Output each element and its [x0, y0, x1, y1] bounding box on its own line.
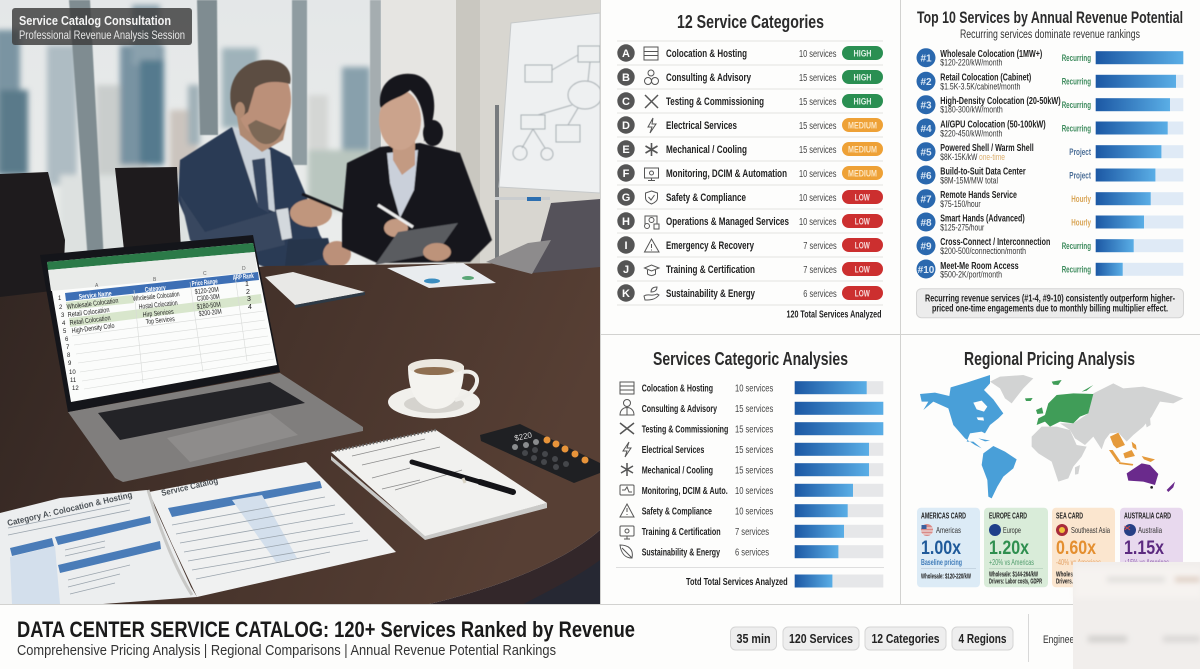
analysis row: training: Training & Certification: [642, 527, 721, 538]
spreadsheet text: $200-20M: [198, 309, 222, 318]
rank 8: Hourly: [1071, 217, 1091, 227]
card: Americas: [917, 508, 980, 587]
analysis row: colocation: Colocation & Hosting: [642, 383, 713, 394]
card: Southeast Asia: [1052, 508, 1115, 587]
analysis row: training: [620, 525, 883, 539]
rank 10: Recurring: [1062, 265, 1091, 275]
rank 9: $200-500/connection/month: [940, 246, 1026, 256]
row K: K: [622, 288, 630, 300]
footer subtitle: Comprehensive Pricing Analysis | Regional Comparisons | Annual Revenue Potential Rankings: [17, 642, 556, 659]
map: Europe: [1025, 380, 1093, 427]
row C: C: [622, 96, 630, 108]
card: Europe: [984, 508, 1048, 587]
spreadsheet text: 1: [245, 281, 249, 288]
rank 4: Recurring: [1062, 123, 1091, 133]
office wall: [381, 0, 600, 270]
row I: [617, 236, 883, 254]
card: Europe: Wholesale: $144-264/kW: [989, 572, 1038, 578]
panel: regional pricing analysis: [917, 349, 1183, 587]
card: Australia: 1.15x: [1124, 538, 1164, 559]
row D: MEDIUM: [848, 120, 877, 130]
map: Americas: [920, 375, 1017, 498]
rank 5: Powered Shell / Warm Shell: [940, 143, 1034, 154]
spreadsheet text: $120-20M: [194, 287, 219, 296]
row E: MEDIUM: [848, 144, 877, 154]
rank 3: #3: [920, 100, 932, 112]
rank 6: $8M-15M/MW total: [940, 175, 998, 185]
window mullions: [69, 0, 381, 262]
rank 3: High-Density Colocation (20-50kW): [940, 96, 1061, 107]
rank 6: Project: [1069, 170, 1091, 180]
rank 9: Cross-Connect / Interconnection: [940, 237, 1050, 248]
rank 5: $8K-15K/kW: [940, 152, 978, 162]
rank 2: Retail Colocation (Cabinet): [940, 72, 1031, 84]
chip: 12 Categories: 12 Categories: [872, 631, 940, 646]
row G: LOW: [855, 192, 870, 202]
map: Hudson Bay and Great Lakes: [973, 401, 987, 421]
analysis row: testing: [620, 422, 883, 436]
rank 1: $120-220/kW/month: [940, 58, 1002, 68]
rank 10: #10: [918, 265, 935, 276]
spreadsheet text: 2: [59, 305, 63, 311]
card: Southeast Asia: -40% vs Americas: [1056, 558, 1101, 567]
rank 4: [916, 118, 1183, 138]
footer title: DATA CENTER SERVICE CATALOG: 120+ Services Ranked by Revenue: [17, 617, 635, 642]
background laptop: [486, 199, 600, 274]
rank 5: [916, 142, 1183, 162]
spreadsheet text: Top Services: [145, 316, 175, 326]
analysis row: consulting: 15 services: [735, 403, 773, 415]
spreadsheet text: 2: [246, 289, 250, 296]
row A: HIGH: [854, 48, 872, 58]
row G: 10 services: [799, 193, 836, 204]
card: Southeast Asia: SEA CARD: [1056, 510, 1083, 520]
row F: [617, 164, 883, 182]
rank 2: Recurring: [1062, 77, 1091, 87]
spreadsheet text: Hirp Services: [142, 309, 174, 319]
row I: Emergency & Recovery: [666, 240, 755, 252]
rank 6: Build-to-Suit Data Center: [940, 166, 1026, 178]
whiteboard with diagram: [495, 13, 602, 275]
rank 10: $500-2K/port/month: [940, 269, 1002, 279]
analysis total row: [686, 574, 883, 588]
row G: [617, 188, 883, 206]
analysis row: electrical: 15 services: [735, 444, 773, 456]
rank 7: Hourly: [1071, 194, 1091, 204]
spreadsheet text: A: [95, 283, 99, 289]
analysis row: mechanical: [621, 463, 883, 476]
spreadsheet text: Retail Colocation: [69, 315, 111, 327]
row J: LOW: [855, 264, 870, 274]
map: Australia: [1127, 463, 1175, 492]
subtitle: Recurring services dominate revenue rankings: [960, 29, 1140, 41]
analysis row: testing: 15 services: [735, 424, 773, 436]
spreadsheet text: 11: [70, 378, 77, 384]
rank 9: #9: [920, 242, 932, 252]
analysis row: consulting: Consulting & Advisory: [642, 404, 717, 415]
row G: Safety & Compliance: [666, 192, 746, 204]
rank 7: $75-150/hour: [940, 199, 981, 209]
rank 5: #5: [920, 148, 932, 158]
row B: HIGH: [854, 72, 872, 82]
analysis row: mechanical: 15 services: [735, 464, 773, 476]
spiral notepad with pen: [331, 430, 547, 540]
row I: LOW: [855, 240, 870, 250]
rank 5: Project: [1069, 147, 1091, 157]
row F: 10 services: [799, 169, 836, 180]
open service catalog book: Service Catalog: [160, 475, 219, 498]
row A: A: [622, 48, 630, 60]
row H: [617, 212, 883, 230]
spreadsheet text: 7: [66, 345, 70, 351]
rank 5: one-time: [979, 152, 1005, 162]
open service catalog book: [0, 462, 396, 604]
row G: G: [622, 192, 630, 204]
row A: [617, 44, 883, 62]
callout: recurring revenue: [916, 289, 1184, 318]
rank 3: $180-300/kW/month: [940, 105, 1003, 115]
chip: 35 min: [730, 627, 776, 650]
rank 4: AI/GPU Colocation (50-100kW): [940, 120, 1046, 130]
row E: [617, 140, 883, 158]
card: Australia: Australia: [1138, 525, 1162, 535]
panel: services categoric analysis: [616, 349, 884, 588]
spreadsheet text: 8: [67, 353, 71, 359]
spreadsheet text: 10: [69, 370, 76, 376]
analysis row: monitoring: Monitoring, DCIM & Auto.: [642, 486, 728, 497]
row B: Consulting & Advisory: [666, 72, 752, 84]
chip: 35 min: 35 min: [736, 631, 771, 646]
row K: 6 services: [803, 289, 837, 300]
row H: H: [622, 216, 630, 228]
spreadsheet text: Category: [144, 285, 166, 294]
card: Americas: AMERICAS CARD: [921, 510, 966, 520]
window with city skyline: [0, 0, 381, 267]
card: Europe: 1.20x: [989, 538, 1029, 559]
rank 1: [916, 48, 1183, 68]
row A: 10 services: [799, 49, 836, 60]
analysis row: mechanical: Mechanical / Cooling: [642, 465, 713, 476]
row C: [617, 92, 883, 110]
row C: 15 services: [799, 97, 836, 108]
calculator phone: $220: [514, 430, 533, 443]
spreadsheet text: Service Name: [78, 291, 112, 301]
spreadsheet text: 12: [72, 386, 79, 392]
spreadsheet text: C: [203, 271, 207, 277]
rank 3: Recurring: [1062, 100, 1091, 110]
row J: [617, 260, 883, 278]
card: Europe: Drivers: Labor costs, GDPR: [989, 578, 1042, 586]
row J: J: [623, 264, 629, 276]
rank 6: [916, 166, 1183, 185]
chip: 120 Services: 120 Services: [789, 631, 853, 646]
analysis row: colocation: [620, 381, 883, 394]
row I: I: [624, 240, 628, 252]
heading: Regional Pricing Analysis: Regional Pricing Analysis: [964, 349, 1135, 369]
row E: 15 services: [799, 145, 836, 156]
spreadsheet text: [58, 266, 254, 392]
rank 4: $220-450/kW/month: [940, 128, 1002, 138]
spreadsheet text: B: [153, 277, 157, 283]
photo caption: [12, 8, 192, 45]
analysis row: training: 7 services: [735, 526, 769, 538]
spreadsheet text: Wholesale Colocation: [132, 291, 180, 303]
map: Southeast Asia: [1109, 433, 1155, 466]
row D: D: [622, 120, 630, 132]
row B: 15 services: [799, 73, 836, 84]
spreadsheet text: 9: [68, 361, 72, 367]
rank 9: Recurring: [1062, 241, 1091, 251]
card: Europe: EUROPE CARD: [989, 510, 1027, 520]
row J: Training & Certification: [666, 264, 755, 276]
spreadsheet text: 3: [61, 313, 65, 319]
chip: 4 Regions: 4 Regions: [958, 631, 1006, 646]
rank 8: #8: [920, 218, 932, 229]
spreadsheet text: ARP Rank: [232, 273, 254, 282]
table lower edge and floor: [421, 530, 600, 606]
spreadsheet text: 5: [63, 329, 67, 335]
heading: Services Categoric Analysis: Services Categoric Analysies: [653, 349, 848, 369]
rank 4: #4: [920, 124, 932, 135]
photo caption: Professional Revenue Analysis Session: [19, 28, 185, 42]
rank 8: [916, 212, 1183, 233]
card: Americas: Baseline pricing: [921, 557, 962, 567]
row H: 10 services: [799, 217, 836, 228]
blurred corner overlay: [1073, 562, 1200, 669]
laptop with spreadsheet: [40, 235, 363, 482]
documents on table: [265, 263, 496, 308]
chip: 120 Services: [783, 627, 859, 650]
row E: Mechanical / Cooling: [666, 144, 747, 156]
rank 8: $125-275/hour: [940, 223, 984, 233]
spreadsheet text: Retail Colocation: [67, 307, 110, 319]
woman in black suit: [342, 74, 492, 265]
analysis row: electrical: Electrical Services: [642, 445, 705, 456]
analysis row: monitoring: 10 services: [735, 485, 773, 497]
footer band: [0, 605, 1200, 669]
spreadsheet text: 1: [58, 296, 62, 302]
rank 2: #2: [920, 77, 932, 88]
rank 1: Recurring: [1062, 53, 1091, 63]
heading: 12 Service Categories: 12 Service Categories: [677, 12, 824, 32]
card: Southeast Asia: Wholes: [1056, 572, 1073, 578]
spreadsheet text: 6: [65, 337, 69, 343]
card: Southeast Asia: Southeast Asia: [1071, 525, 1110, 535]
rank 6: #6: [920, 171, 932, 182]
card: Americas: Wholesale: $120-220/kW: [921, 574, 971, 580]
row C: HIGH: [854, 96, 872, 106]
photo caption: Service Catalog Consultation: [19, 13, 171, 28]
analysis row: safety: 10 services: [735, 506, 773, 518]
analysis row: sustainability: 6 services: [735, 546, 769, 558]
analysis row: safety: [620, 504, 883, 518]
row B: [617, 68, 883, 86]
analysis total row: Totd Total Services Analyzed: [686, 576, 788, 588]
row E: E: [622, 144, 630, 156]
spreadsheet text: 4: [62, 321, 66, 327]
chip: 12 Categories: [865, 627, 946, 650]
rank 10: [916, 260, 1183, 279]
card: Europe: +20% vs Americas: [989, 558, 1034, 567]
rank 7: #7: [920, 194, 932, 206]
spreadsheet text: $180-50M: [196, 302, 221, 311]
spreadsheet text: Wholesale Colocation: [66, 298, 119, 311]
analysis row: testing: Testing & Commissioning: [642, 424, 728, 435]
row B: B: [622, 72, 630, 84]
card: Americas: Americas: [936, 525, 961, 535]
spreadsheet text: Price Range: [191, 278, 218, 288]
open service catalog book: Category A: Colocation & Hosting: [6, 489, 133, 528]
total services note: 120 Total Services Analyzed: [786, 310, 882, 320]
row F: MEDIUM: [848, 168, 877, 178]
card: Australia: [1120, 508, 1183, 587]
panel: top 10 services: [916, 9, 1184, 318]
card: Australia: AUSTRALIA CARD: [1124, 510, 1171, 520]
rank 9: [916, 236, 1183, 256]
row D: 15 services: [799, 121, 836, 132]
card: Europe: Europe: [1003, 525, 1021, 535]
analysis row: sustainability: Sustainability & Energy: [642, 547, 720, 558]
card: Americas: 1.00x: [921, 538, 961, 559]
row F: F: [623, 168, 630, 180]
coffee cup on saucer: [388, 359, 480, 418]
card: Southeast Asia: Drivers.: [1056, 578, 1073, 586]
analysis row: monitoring: [620, 484, 883, 497]
row K: Sustainability & Energy: [666, 288, 756, 300]
row A: Colocation & Hosting: [666, 48, 747, 60]
spreadsheet text: 4: [248, 304, 252, 311]
rank 2: $1.5K-3.5K/cabinet/month: [940, 81, 1020, 91]
rank 3: [916, 95, 1183, 115]
card: Australia: +15% vs Americas: [1124, 558, 1169, 567]
analysis row: safety: Safety & Compliance: [642, 506, 712, 517]
row D: Electrical Services: [666, 120, 737, 132]
photo: consultation meeting scene: [0, 0, 602, 606]
row J: 7 services: [803, 265, 837, 276]
analysis row: consulting: [620, 400, 883, 415]
chairs: [0, 167, 181, 310]
row I: 7 services: [803, 241, 837, 252]
rank 7: [916, 189, 1183, 209]
calculator phone: [480, 424, 600, 483]
row H: LOW: [855, 216, 870, 226]
row F: Monitoring, DCIM & Automation: [666, 168, 787, 180]
world map: [920, 375, 1183, 498]
spreadsheet text: 3: [247, 296, 251, 303]
spreadsheet text: D: [242, 266, 246, 272]
map: Tasmania: [1150, 486, 1153, 489]
row K: LOW: [855, 288, 870, 298]
spreadsheet text: Hostal Colocation: [138, 300, 178, 311]
analysis row: sustainability: [620, 545, 883, 558]
chip: 4 Regions: [952, 627, 1013, 650]
analysis row: electrical: [623, 442, 883, 457]
row D: [617, 116, 883, 134]
rank 1: #1: [920, 54, 932, 64]
analysis row: colocation: 10 services: [735, 382, 773, 394]
man in navy suit: [178, 60, 357, 268]
rank 1: Wholesale Colocation (1MW+): [940, 49, 1042, 60]
spreadsheet text: C300-30M: [196, 294, 220, 303]
row H: Operations & Managed Services: [666, 216, 789, 228]
map: rest of world: [990, 375, 1183, 482]
rank 10: Meet-Me Room Access: [940, 261, 1019, 272]
card: Southeast Asia: 0.60x: [1056, 538, 1096, 559]
spreadsheet text: High-Density Colo: [71, 323, 115, 335]
rank 7: Remote Hands Service: [940, 190, 1017, 201]
rank 2: [916, 72, 1183, 91]
rank 8: Smart Hands (Advanced): [940, 214, 1025, 224]
table top: [0, 262, 600, 606]
footer credit text: Engineer: [1043, 634, 1077, 646]
row C: Testing & Commissioning: [666, 96, 764, 108]
panel: 12 service categories: [601, 0, 900, 334]
row K: [617, 284, 883, 302]
